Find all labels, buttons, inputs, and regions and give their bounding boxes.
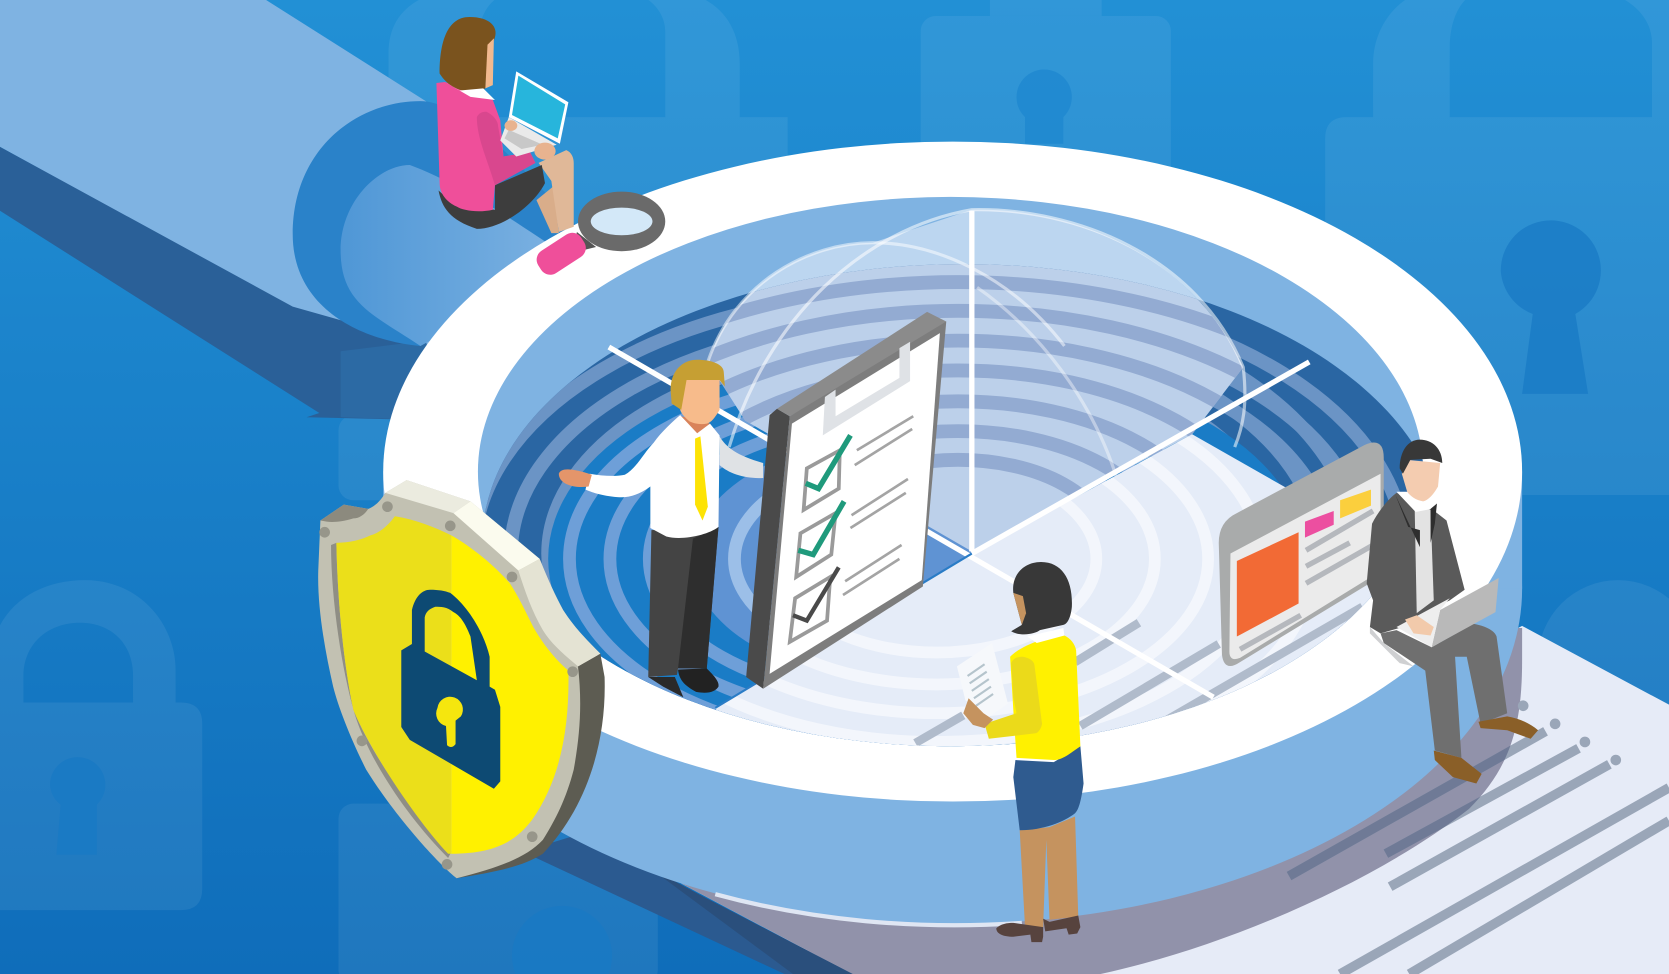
checklist rows <box>790 450 840 642</box>
dome wall tint <box>752 210 1198 300</box>
icon: security shield with padlock <box>318 480 605 878</box>
padlock <box>401 590 500 789</box>
lower bright sector <box>716 434 1372 746</box>
paper document <box>523 626 1669 974</box>
white ring rim <box>383 142 1522 802</box>
document <box>957 643 1008 719</box>
shield face <box>336 516 451 854</box>
magnifying glass cylinder side <box>383 253 1522 925</box>
clipboard checklist <box>746 312 946 689</box>
figure: man with yellow tie <box>559 360 763 697</box>
figure: woman in yellow with document <box>957 562 1084 942</box>
magnifier handle barrel <box>0 0 580 420</box>
figure: man in grey suit with laptop <box>1367 440 1538 783</box>
monitor panel <box>1219 443 1384 666</box>
inner wall <box>478 197 1423 746</box>
glass dome overlay <box>706 208 1246 550</box>
keyhole <box>436 697 463 747</box>
laptop <box>1432 578 1499 647</box>
icon: magnifying glass on rim <box>533 192 665 279</box>
laptop <box>509 71 568 144</box>
clipboard clip <box>823 342 910 435</box>
document lines <box>1289 731 1669 974</box>
ground shadow <box>681 628 1522 974</box>
crosshair lines <box>609 211 1309 708</box>
figure: woman with laptop <box>436 17 574 233</box>
floor document stripes <box>915 607 1362 743</box>
shield rivets <box>319 501 578 870</box>
floor with concentric rings <box>485 264 1423 746</box>
shield side <box>457 654 605 878</box>
shield bezel <box>318 480 600 878</box>
